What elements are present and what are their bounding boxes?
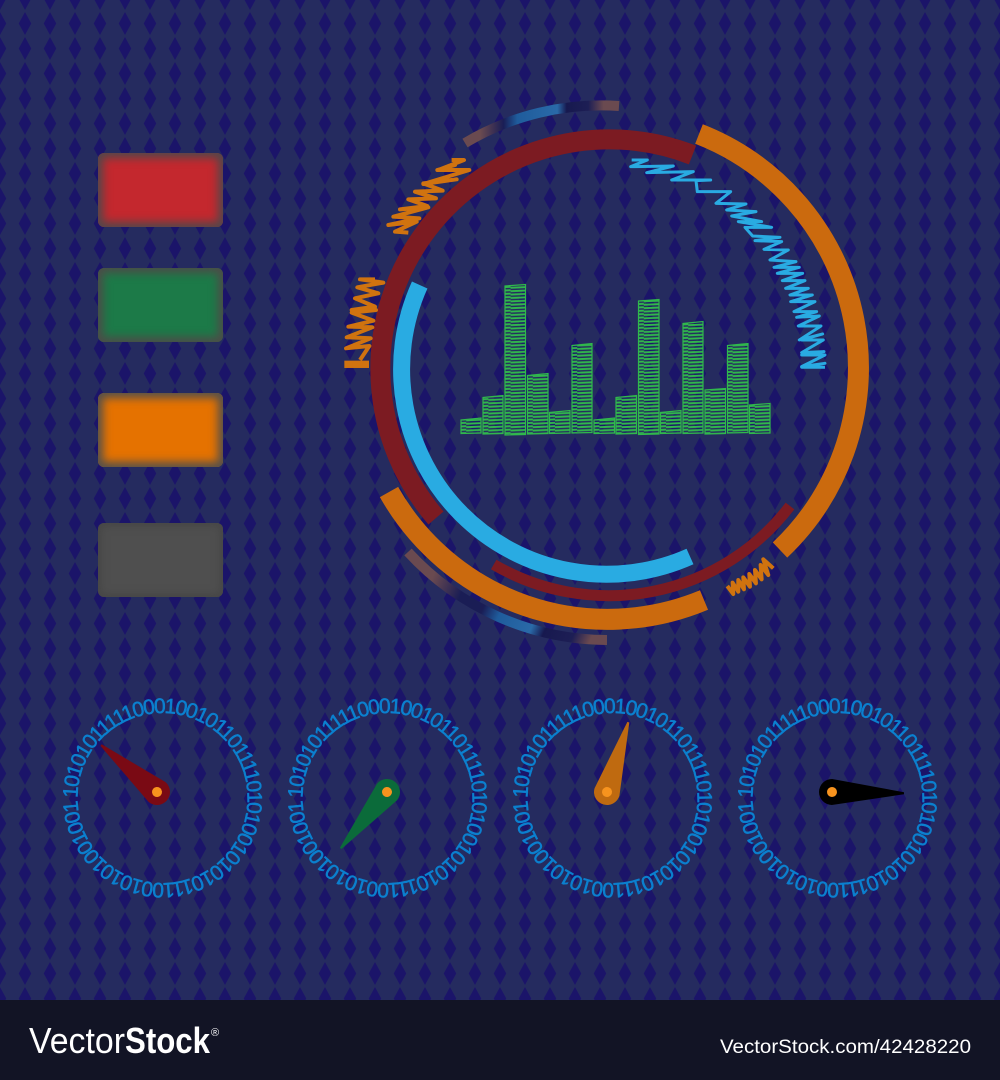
orange scribble bottom right bbox=[727, 559, 773, 594]
top gradient arc bbox=[465, 105, 619, 143]
swatch red bbox=[98, 153, 223, 227]
blue inner arc bbox=[402, 285, 690, 574]
needle 3 bbox=[591, 718, 641, 808]
circular chart bbox=[380, 105, 858, 640]
blue scribble bbox=[631, 160, 825, 367]
binary ring 1: 1010101111100010010110111101010010101011100101010010010010101000100 bbox=[63, 698, 262, 898]
footer bar bbox=[0, 1000, 1000, 1080]
footer url: VectorStock.com/42428220 bbox=[720, 1037, 971, 1058]
footer logo bbox=[29, 1020, 211, 1061]
binary ring 3: 1010101111100010010110111101010010101011100101010010010010101000100 bbox=[513, 698, 712, 898]
gauge 3 bbox=[513, 698, 712, 898]
binary ring 4: 1010101111100010010110111101010010101011100101010010010010101000100 bbox=[738, 698, 938, 898]
gauge 4 bbox=[738, 698, 938, 898]
gauge 1 bbox=[63, 698, 262, 898]
swatch gray bbox=[98, 523, 223, 597]
orange scribble left bbox=[344, 279, 383, 368]
binary ring 2: 1010101111100010010110111101010010101011100101010010010010101000100 bbox=[288, 698, 488, 898]
orange outer arc right bbox=[699, 134, 858, 550]
swatch orange bbox=[98, 393, 223, 467]
needle 1 bbox=[93, 735, 175, 810]
registered mark: ® bbox=[211, 1027, 219, 1039]
footer logo: Vector bbox=[29, 1020, 125, 1061]
dark red thin arc bbox=[494, 506, 790, 596]
swatch green bbox=[98, 268, 223, 342]
needle 4 bbox=[819, 779, 904, 806]
orange outer arc bottom bbox=[389, 492, 704, 619]
footer logo: Stock bbox=[125, 1020, 211, 1061]
needle 2 bbox=[331, 774, 405, 857]
bottom gradient arc bbox=[408, 552, 607, 640]
orange scribble upper left bbox=[388, 160, 469, 233]
gauge 2 bbox=[288, 698, 488, 898]
dark red main arc bbox=[380, 139, 692, 518]
bar chart bbox=[461, 284, 770, 435]
